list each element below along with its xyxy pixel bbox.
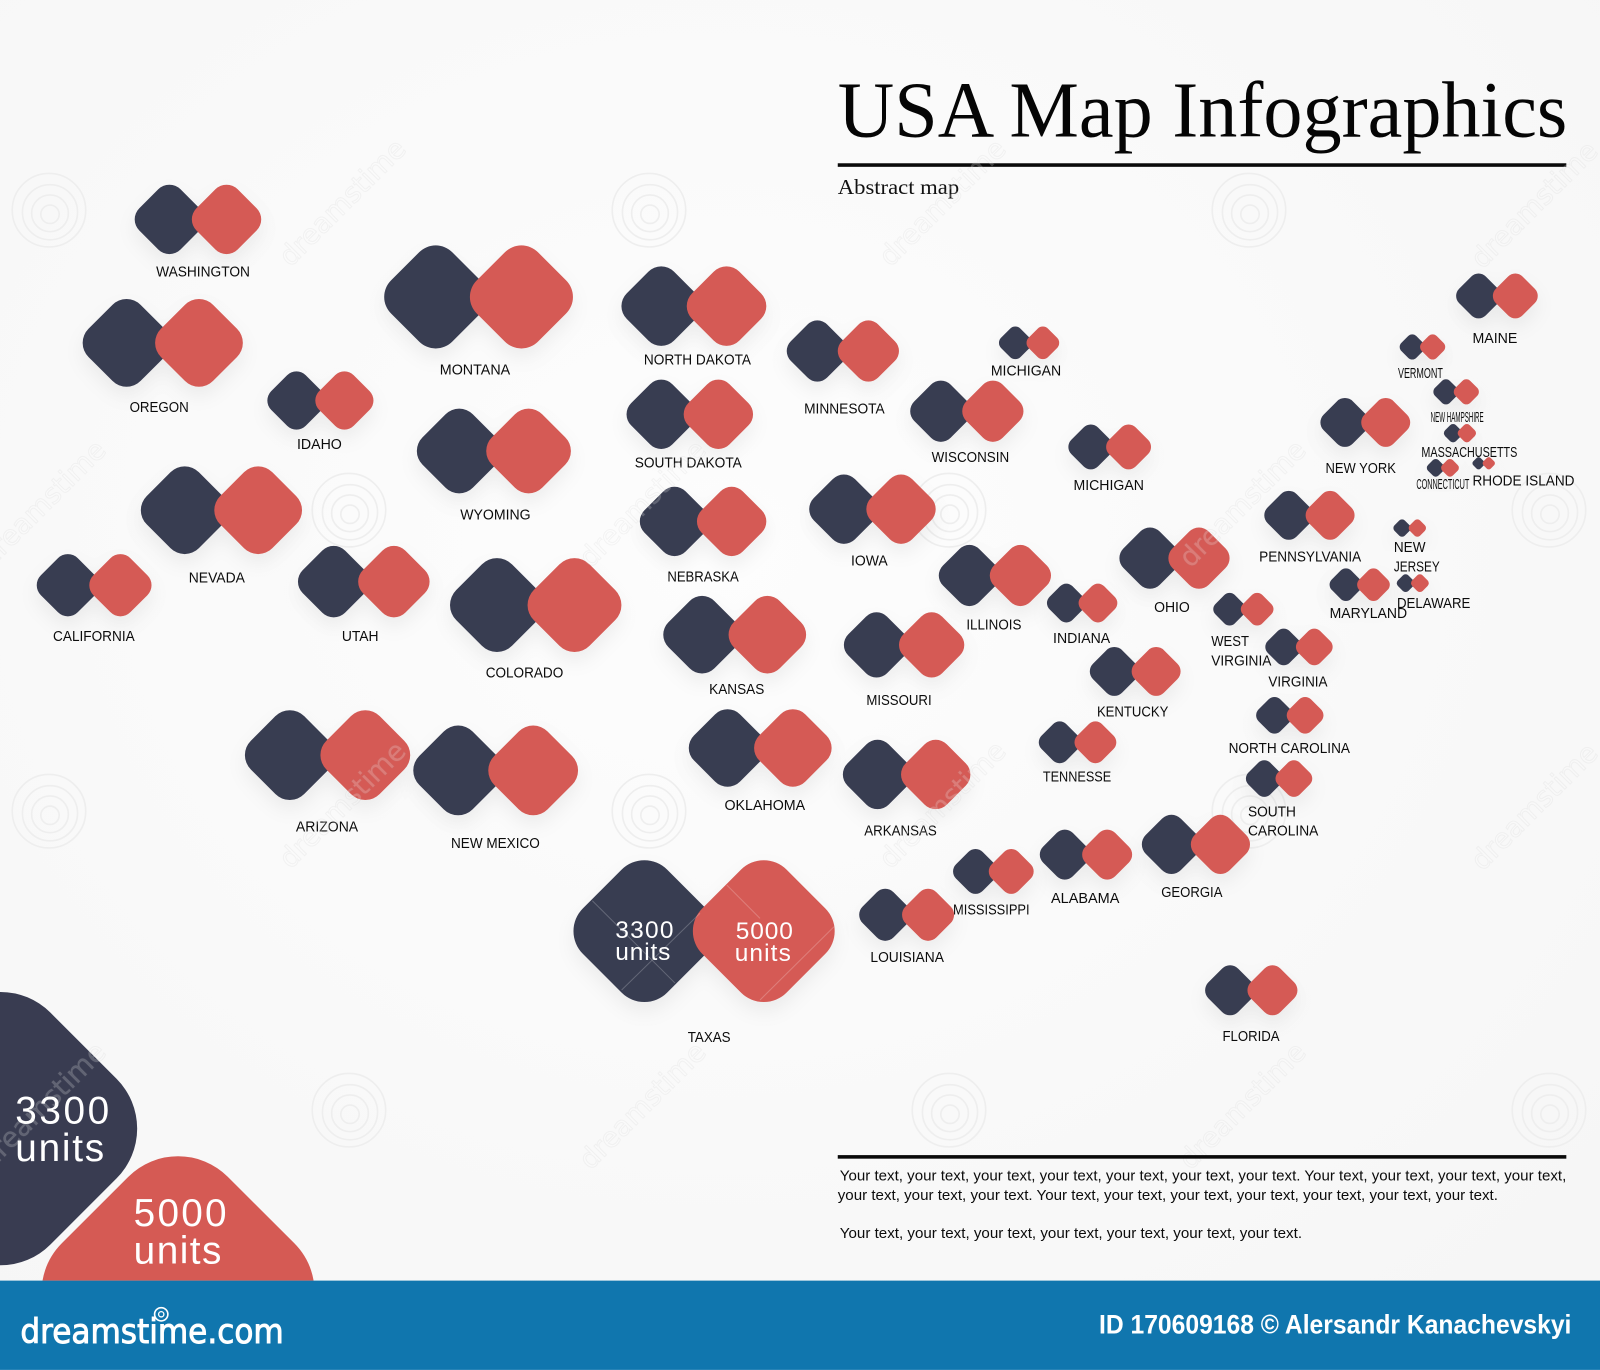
state: Missouri <box>838 606 970 709</box>
text: dreamstime <box>573 1036 712 1176</box>
legend: 5000 units <box>42 1156 314 1281</box>
state: Maine <box>1452 269 1542 347</box>
state: Alabama <box>1035 825 1137 907</box>
state: Ohio <box>1114 522 1235 616</box>
state: Nevada: NEVADA <box>189 571 245 587</box>
state: Nevada <box>133 458 310 587</box>
state: New Mexico: NEW MEXICO <box>451 836 540 852</box>
state: South Carolina <box>1242 757 1318 840</box>
state: Mississippi: MISSISSIPPI <box>953 902 1030 918</box>
state: Alabama: ALABAMA <box>1051 891 1120 907</box>
state: Pennsylvania <box>1259 486 1361 566</box>
state: Oklahoma: OKLAHOMA <box>724 798 805 814</box>
state: Rhode Island: RHODE ISLAND <box>1472 474 1574 490</box>
text: dreamstime <box>1173 434 1312 574</box>
state: Iowa: IOWA <box>851 553 888 569</box>
state: Montana <box>374 236 583 378</box>
state: Florida <box>1200 961 1302 1045</box>
state: Washington <box>128 178 268 281</box>
text: dreamstime <box>873 735 1012 875</box>
state: California: CALIFORNIA <box>53 629 135 645</box>
state: Oregon: OREGON <box>130 400 189 416</box>
text: NEW HAMPSHIRE <box>1431 410 1484 426</box>
state: West Virginia <box>1210 590 1277 669</box>
state: Nebraska <box>633 480 773 586</box>
state: Idaho: IDAHO <box>297 437 342 453</box>
state: West Virginia: VIRGINIA <box>1211 653 1272 669</box>
state: Pennsylvania: PENNSYLVANIA <box>1259 550 1361 566</box>
legend: 3300 units <box>0 992 137 1265</box>
state: California <box>31 548 157 645</box>
text: dreamstime <box>573 434 712 574</box>
state: Tennessee: TENNESSE <box>1043 770 1111 786</box>
state: Vermont <box>1397 332 1448 382</box>
state: Michigan (lower): MICHIGAN <box>1073 478 1144 494</box>
state: Kentucky <box>1085 642 1185 720</box>
state: Texas with unit values <box>560 847 848 1046</box>
state: Louisiana <box>854 884 959 966</box>
state: New Jersey: NEW <box>1394 540 1426 556</box>
state: Tennessee <box>1035 717 1120 786</box>
state: Nebraska: NEBRASKA <box>667 570 739 586</box>
state: New York <box>1316 393 1415 477</box>
state: Montana: MONTANA <box>440 362 510 378</box>
state: Utah <box>291 539 436 645</box>
footer text block: Your text, your text, your text, your text, your text, your text, your text. <box>840 1226 1302 1242</box>
state: Virginia <box>1262 625 1336 691</box>
state: Idaho <box>262 366 379 453</box>
text: CONNECTICUT <box>1416 477 1469 493</box>
state: Maryland: MARYLAND <box>1330 606 1407 622</box>
state: Kansas: KANSAS <box>709 682 764 698</box>
state: Michigan (upper) <box>991 323 1062 380</box>
state: South Dakota: SOUTH DAKOTA <box>635 455 742 471</box>
value: 5000 units: 5000 <box>736 918 793 945</box>
state: New Jersey: JERSEY <box>1394 559 1440 575</box>
state: Washington: WASHINGTON <box>156 265 250 281</box>
state: Arkansas: ARKANSAS <box>864 824 937 840</box>
state: Kentucky: KENTUCKY <box>1097 704 1168 720</box>
state: Missouri: MISSOURI <box>866 693 932 709</box>
value: 3300 units: units <box>615 939 670 966</box>
state: South Carolina: CAROLINA <box>1248 824 1318 840</box>
state: New York: NEW YORK <box>1326 461 1396 477</box>
text: dreamstime <box>1173 1036 1312 1176</box>
state: Colorado: COLORADO <box>486 666 563 682</box>
state: Michigan (lower) <box>1064 420 1155 494</box>
state: Delaware: DELAWARE <box>1397 596 1471 612</box>
value: 5000 units: units <box>735 940 791 967</box>
state: North Dakota: NORTH DAKOTA <box>644 352 751 368</box>
state: Wisconsin: WISCONSIN <box>932 450 1009 466</box>
state: New Hampshire <box>1431 377 1484 426</box>
state: Louisiana: LOUISIANA <box>870 950 944 966</box>
state: Georgia: GEORGIA <box>1161 885 1223 901</box>
state: Iowa <box>803 468 942 569</box>
state: North Carolina: NORTH CAROLINA <box>1229 741 1350 757</box>
legend: 5000 units: units <box>134 1229 221 1272</box>
state: New Mexico <box>405 717 586 852</box>
state: Massachusetts: MASSACHUSETTS <box>1421 445 1517 461</box>
text: dreamstime <box>873 133 1012 273</box>
state: Indiana <box>1043 580 1121 647</box>
state: Virginia: VIRGINIA <box>1268 675 1328 691</box>
subtitle: Abstract map <box>838 175 959 199</box>
footer text block <box>838 1155 1566 1242</box>
logo: dreamstime.com <box>20 1312 284 1351</box>
state: New Jersey <box>1392 518 1440 575</box>
state: Minnesota <box>781 315 905 417</box>
state: Massachusetts <box>1421 422 1517 461</box>
state: Minnesota: MINNESOTA <box>804 401 885 417</box>
image id credit: ID 170609168 © Alersandr Kanachevskyi <box>1099 1310 1571 1340</box>
state: Georgia <box>1136 809 1256 901</box>
state: Wyoming: WYOMING <box>460 507 531 523</box>
title: USA Map Infographics <box>838 67 1567 155</box>
state: West Virginia: WEST <box>1211 634 1249 650</box>
value: 3300 units <box>615 917 673 966</box>
value: 3300 units: 3300 <box>615 917 673 944</box>
state: Wyoming <box>409 401 579 523</box>
state: Arkansas <box>836 733 977 840</box>
legend: 3300 units: units <box>15 1127 104 1170</box>
state: North Carolina <box>1229 693 1350 757</box>
state: Ohio: OHIO <box>1154 600 1190 616</box>
state: Indiana: INDIANA <box>1053 631 1110 647</box>
state: Illinois: ILLINOIS <box>966 618 1022 634</box>
footer text block: Your text, your text, your text, your text, your text, your text, your text. Your text, your text, your text, your text, <box>840 1169 1566 1185</box>
state: Michigan (upper): MICHIGAN <box>991 364 1061 380</box>
state: Mississippi <box>949 845 1038 918</box>
state: Arizona: ARIZONA <box>296 820 358 836</box>
value: 5000 units <box>735 918 793 967</box>
state: Maine: MAINE <box>1472 331 1517 347</box>
state: Delaware <box>1395 573 1471 612</box>
state: South Dakota <box>620 373 760 471</box>
state: North Dakota <box>614 259 774 368</box>
state: Rhode Island <box>1471 456 1574 490</box>
state: Maryland <box>1327 565 1407 622</box>
state: Wisconsin <box>904 375 1029 466</box>
state: Colorado <box>441 549 630 682</box>
legend: 5000 units: 5000 <box>134 1192 227 1235</box>
state: South Carolina: SOUTH <box>1248 804 1296 820</box>
state: Oklahoma <box>681 702 839 814</box>
bottom band <box>0 1281 1600 1370</box>
state: Florida: FLORIDA <box>1222 1029 1280 1045</box>
legend: 3300 units: 3300 <box>15 1089 109 1132</box>
state: Utah: UTAH <box>342 629 379 645</box>
state: Oregon <box>74 291 251 416</box>
state: Arizona <box>236 702 419 836</box>
text: dreamstime <box>273 735 412 875</box>
state: Illinois <box>933 539 1057 634</box>
state: Connecticut <box>1416 457 1469 493</box>
state: Texas with unit values: TAXAS <box>688 1030 731 1046</box>
footer text block: your text, your text, your text. Your text, your text, your text, your text, your text, your text, your text. <box>838 1188 1498 1204</box>
state: Kansas <box>656 589 813 698</box>
state: Vermont: VERMONT <box>1398 366 1443 382</box>
text: dreamstime <box>273 133 412 273</box>
